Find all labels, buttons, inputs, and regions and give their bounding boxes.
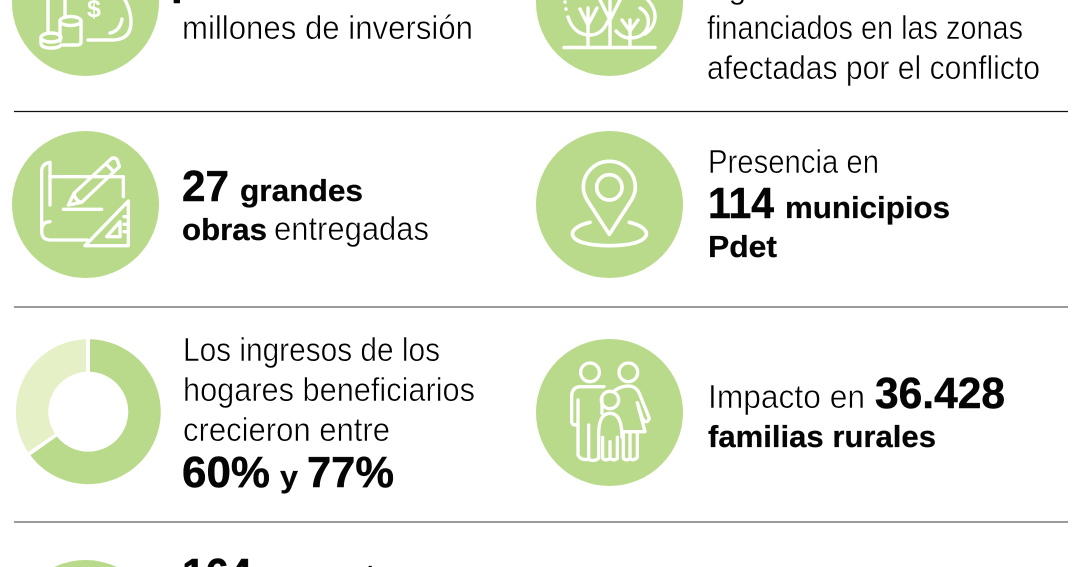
text: municipalities: Pdet — [708, 229, 777, 264]
text: household income: crecieron entre — [183, 411, 390, 448]
text: municipalities: municipios — [785, 190, 950, 225]
text: works delivered — [182, 162, 429, 247]
text: household income: hogares beneficiarios — [183, 371, 475, 408]
text: projects — [182, 550, 412, 567]
text: financed projects: afectadas por el conflicto — [707, 49, 1040, 86]
text: financed projects: financiados en las zonas — [707, 9, 1023, 46]
text: municipalities: 114 — [708, 179, 774, 228]
text: rural families: familias rurales — [708, 419, 936, 454]
icon: trees — [536, 0, 683, 76]
icon: blueprint with pencil and set square — [12, 131, 159, 278]
text: household income — [182, 331, 475, 497]
text: investment: millones de inversión — [182, 9, 473, 46]
text: household income: Los ingresos de los — [183, 331, 440, 368]
text: rural families — [708, 369, 1005, 454]
text: municipalities — [708, 143, 950, 264]
text: rural families: 36.428 — [875, 369, 1005, 418]
panel: municipalities — [536, 131, 950, 278]
text: rural families: Impacto en — [708, 378, 865, 415]
text: household income: 77% — [307, 448, 394, 497]
text: works delivered: 27 — [182, 162, 229, 211]
text: municipalities: Presencia en — [708, 143, 879, 180]
text: household income: y — [280, 459, 299, 494]
panel: works delivered — [12, 131, 429, 278]
text: works delivered: grandes — [240, 173, 363, 208]
icon: location pin — [536, 131, 683, 278]
text: works delivered: entregadas — [274, 210, 429, 247]
panel: financed projects — [536, 0, 1040, 86]
panel: household income — [16, 331, 475, 497]
panel: rural families — [536, 339, 1005, 486]
panel: investment — [12, 0, 473, 76]
icon: green circle — [54, 560, 117, 567]
text: works delivered: obras — [182, 212, 267, 247]
panel: projects (cropped) — [54, 550, 412, 567]
icon: family — [536, 339, 683, 486]
icon: money bag and coins — [12, 0, 159, 76]
chart: income donut — [16, 339, 161, 484]
text: household income: 60% — [182, 448, 270, 497]
text: financed projects — [707, 0, 1040, 86]
